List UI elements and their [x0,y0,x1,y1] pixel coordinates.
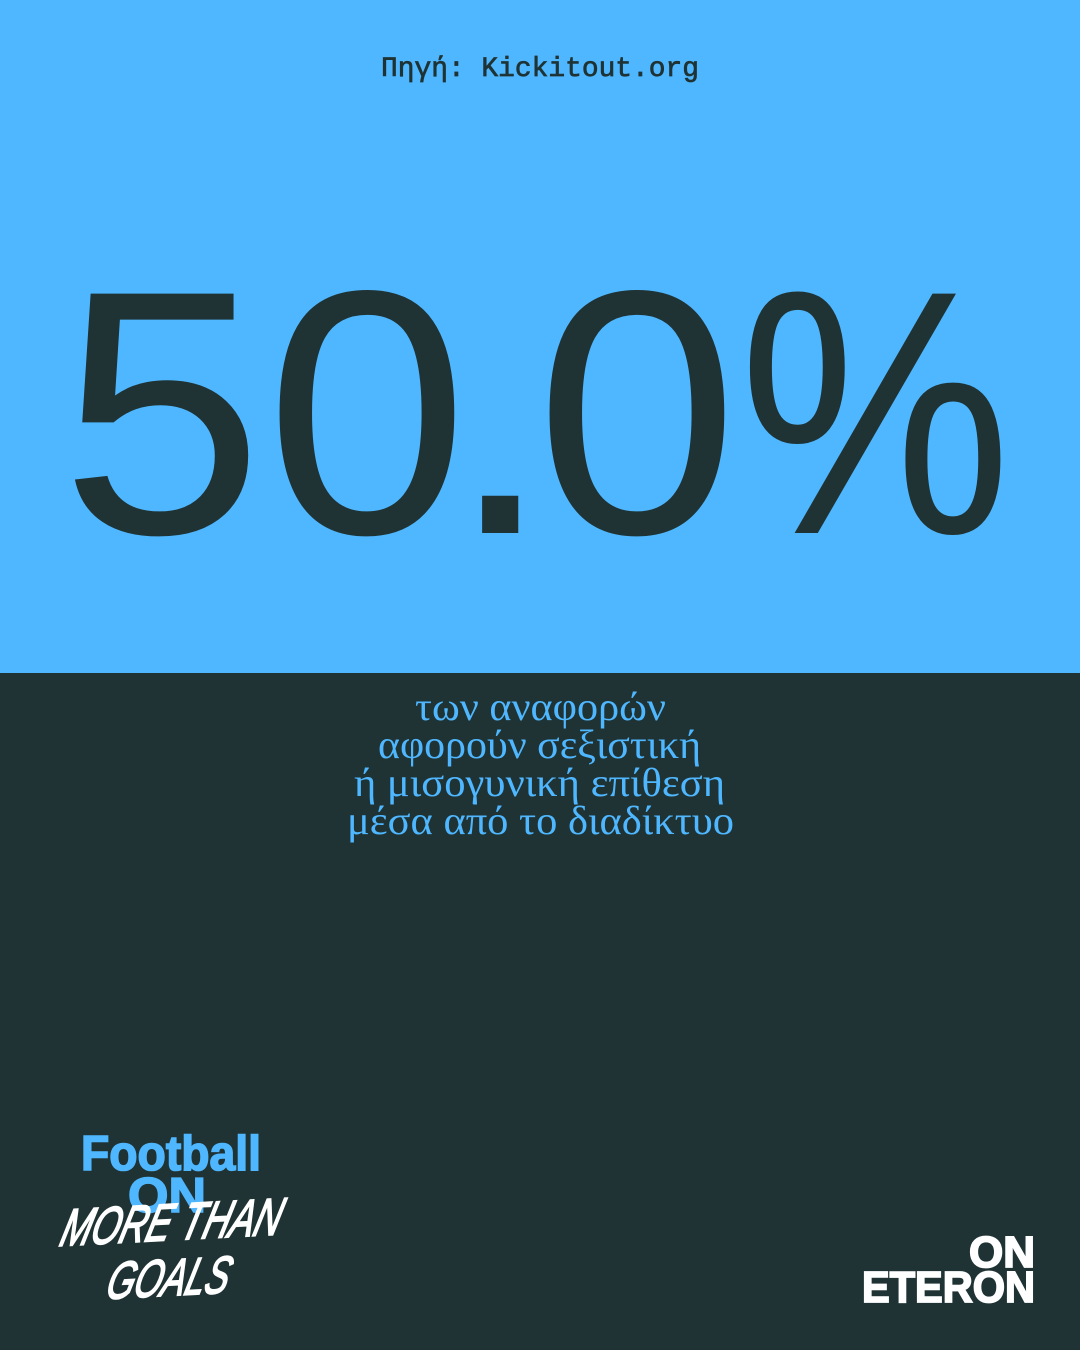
logo: ON ETERON: ETERON [862,1263,1035,1312]
logo script: MORE THAN: MORE THAN [55,1188,290,1258]
logo script: GOALS: GOALS [101,1246,238,1311]
big statistic: 0 [535,218,739,607]
panel: top blue section [0,0,1080,673]
big statistic: 5 [60,218,264,607]
big statistic: 0 [265,218,469,607]
big statistic [60,218,1011,608]
big statistic: . [448,218,553,608]
logo wordmark: Football: Football [81,1127,261,1181]
panel: bottom dark section [0,673,1080,1350]
description text: μέσα από το διαδίκτυο [347,798,734,843]
logo: ON ETERON: ON [969,1228,1035,1277]
big statistic: % [739,219,1011,607]
logo: Football ON More Than Goals [55,1127,290,1311]
logo: ON ETERON [862,1228,1035,1312]
source line: Πηγή: Kickitout.org [381,54,699,85]
description text: αφορούν σεξιστική [378,722,701,767]
description text: των αναφορών [415,684,666,729]
description text [347,684,734,843]
logo wordmark: ON: ON [128,1169,206,1223]
description text: ή μισογυνική επίθεση [354,760,725,805]
